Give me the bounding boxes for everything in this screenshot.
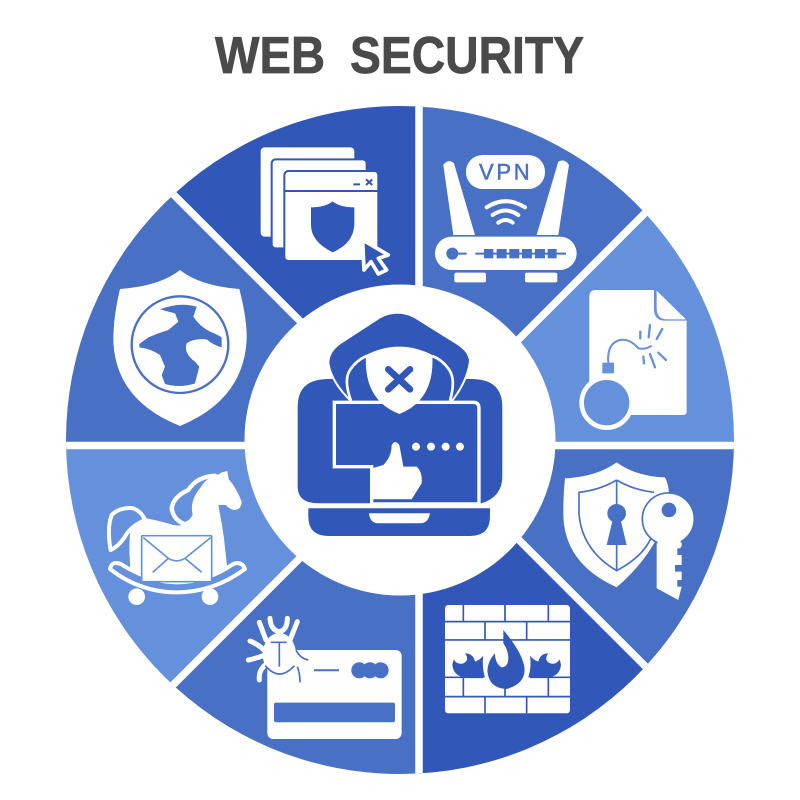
segmented circular wheel xyxy=(66,106,734,774)
icon: shield with globe xyxy=(113,270,247,426)
icon: bug on credit card xyxy=(248,618,402,739)
icon: browser windows with shield xyxy=(261,147,388,274)
icon: file with bomb xyxy=(582,290,687,428)
title: SECURITY xyxy=(350,27,584,85)
center circle xyxy=(244,284,556,596)
icon: firewall with flames xyxy=(445,605,570,713)
icon: trojan rocking horse with envelope xyxy=(109,471,245,605)
icon: hacker at laptop xyxy=(298,313,502,536)
title: WEB xyxy=(215,27,325,85)
icon: VPN router: VPN xyxy=(479,159,532,184)
icon: VPN router xyxy=(435,155,577,282)
icon: shield with keyhole and key xyxy=(563,462,694,600)
title xyxy=(215,27,584,85)
